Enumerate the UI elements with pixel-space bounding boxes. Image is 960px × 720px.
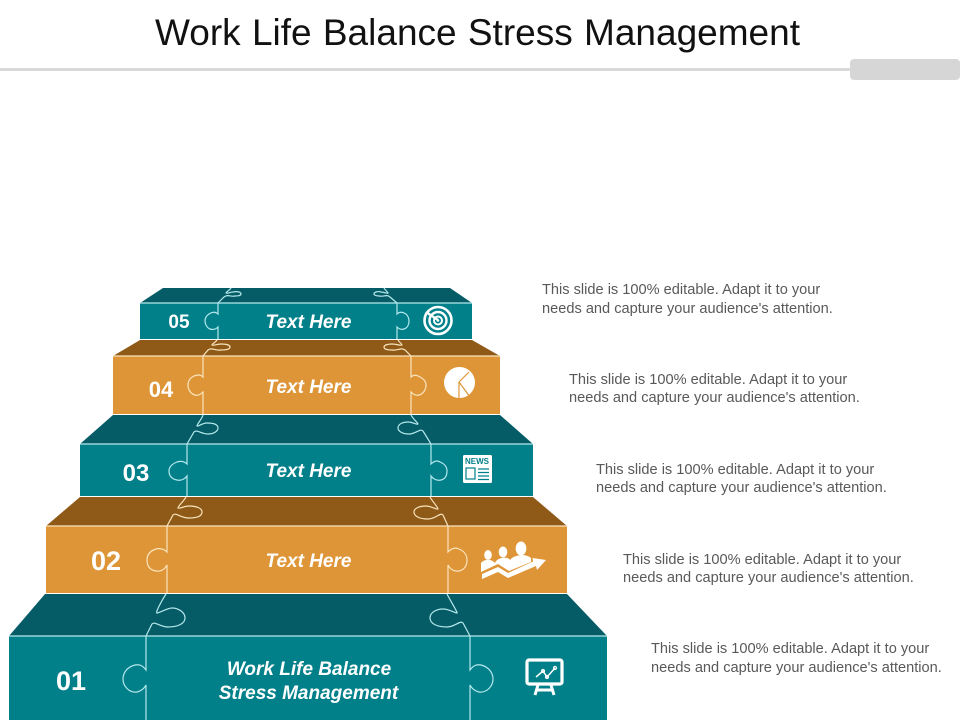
description 03: This slide is 100% editable. Adapt it to your — [596, 462, 874, 478]
description 02: This slide is 100% editable. Adapt it to your — [623, 552, 901, 568]
icon: target — [424, 307, 452, 334]
number 02: 02 — [91, 546, 121, 576]
tier 04 — [113, 340, 500, 414]
icon: presentation easel — [527, 660, 562, 695]
title: Work Life Balance Stress Management — [155, 12, 801, 53]
label: Text Here — [266, 551, 352, 572]
header rule with tab — [0, 59, 960, 80]
icon: team and arrow — [481, 542, 546, 579]
label: main text: Stress Management — [219, 683, 399, 704]
tier 02 — [46, 497, 567, 593]
description 01: needs and capture your audience's attention. — [651, 660, 942, 676]
number 03: 03 — [123, 460, 149, 487]
number 01: 01 — [56, 666, 86, 696]
description 04: needs and capture your audience's attention. — [569, 390, 860, 406]
icon: newspaper: NEWS — [465, 457, 490, 466]
description 05: This slide is 100% editable. Adapt it to your — [542, 282, 820, 298]
label: Text Here — [266, 312, 352, 333]
number 05: 05 — [168, 312, 190, 333]
description 02: needs and capture your audience's attention. — [623, 570, 914, 586]
description 01: This slide is 100% editable. Adapt it to your — [651, 641, 929, 657]
label: Text Here — [266, 377, 352, 398]
number 04: 04 — [149, 377, 174, 402]
tier 05 — [140, 288, 472, 339]
icon: newspaper — [463, 455, 492, 483]
tier 03 — [80, 415, 533, 496]
description 05: needs and capture your audience's attention. — [542, 301, 833, 317]
description 04: This slide is 100% editable. Adapt it to your — [569, 372, 847, 388]
label: main text: Work Life Balance — [227, 659, 392, 680]
tier 01 — [9, 594, 607, 720]
icon: pie chart — [444, 367, 475, 398]
label: Text Here — [266, 461, 352, 482]
description 03: needs and capture your audience's attention. — [596, 480, 887, 496]
label: main text — [219, 659, 399, 704]
